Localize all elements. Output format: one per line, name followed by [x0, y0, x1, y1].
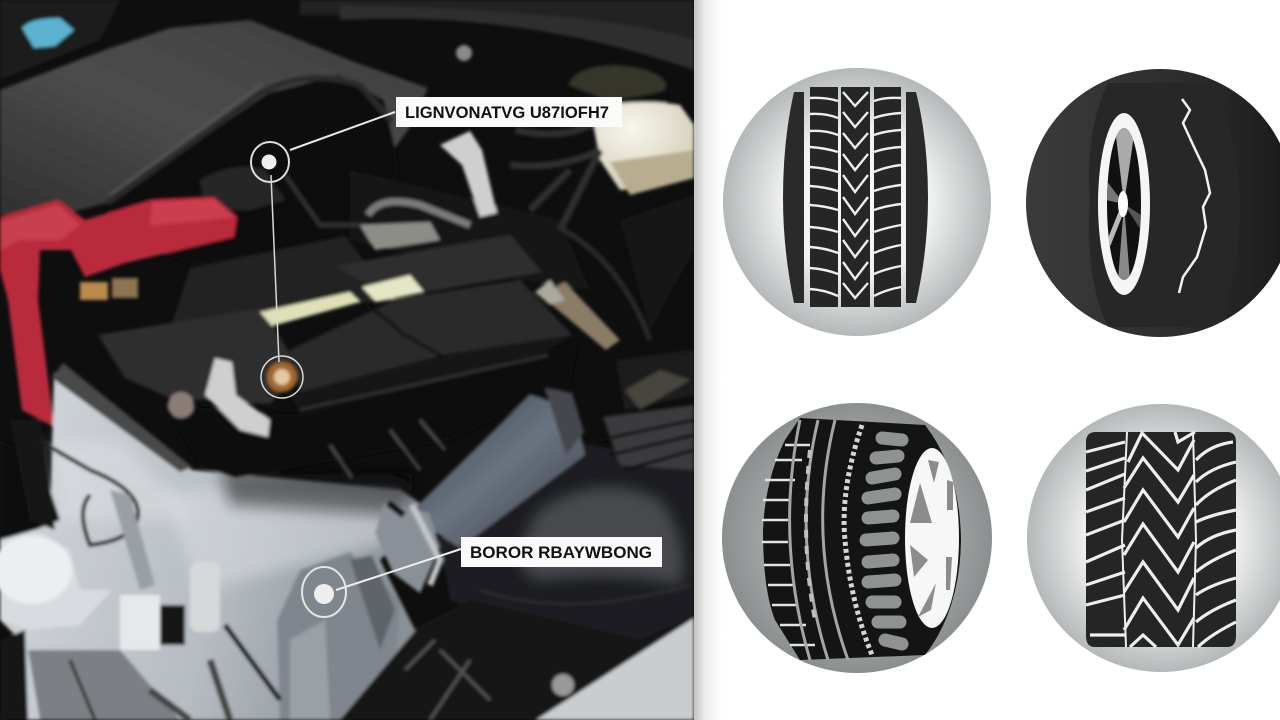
icon: tire tread chevron pattern	[1027, 404, 1280, 672]
left side parts	[0, 492, 62, 542]
callout: top label pointer	[251, 112, 395, 398]
red battery cable	[0, 197, 237, 427]
callout: bottom label	[461, 537, 662, 567]
callout: top label	[396, 97, 622, 127]
top background	[300, 0, 694, 40]
engine cover	[0, 20, 428, 215]
manifold runners	[277, 552, 400, 720]
battery tray	[166, 387, 560, 480]
callout: bottom label pointer	[302, 549, 461, 617]
reservoir cap white	[0, 530, 112, 630]
callout: top label: LIGNVONATVG U87IOFH7	[405, 103, 609, 122]
left-front terminal	[205, 358, 270, 437]
dark blue hose	[408, 395, 585, 548]
hoses	[510, 125, 600, 230]
bottom right dark	[340, 600, 694, 720]
callout: bottom label: BOROR RBAYWBONG	[470, 543, 652, 562]
icon: tire tread front view	[723, 68, 991, 336]
silver pipe	[440, 131, 497, 217]
battery terminal right	[540, 282, 620, 350]
label stickers on battery	[260, 292, 360, 326]
car battery	[170, 236, 395, 330]
mid area behind battery	[350, 170, 590, 290]
panel shadow	[694, 0, 722, 720]
silver engine block	[0, 373, 430, 720]
icon: blue washer cap	[22, 18, 74, 48]
big dark intake	[440, 420, 694, 640]
hose clamp	[375, 503, 440, 593]
icon: tire side view with crack	[1026, 69, 1280, 337]
icon: tire three-quarter view	[722, 403, 992, 673]
brake fluid reservoir	[568, 65, 667, 102]
panel: engine bay photo	[0, 0, 694, 720]
